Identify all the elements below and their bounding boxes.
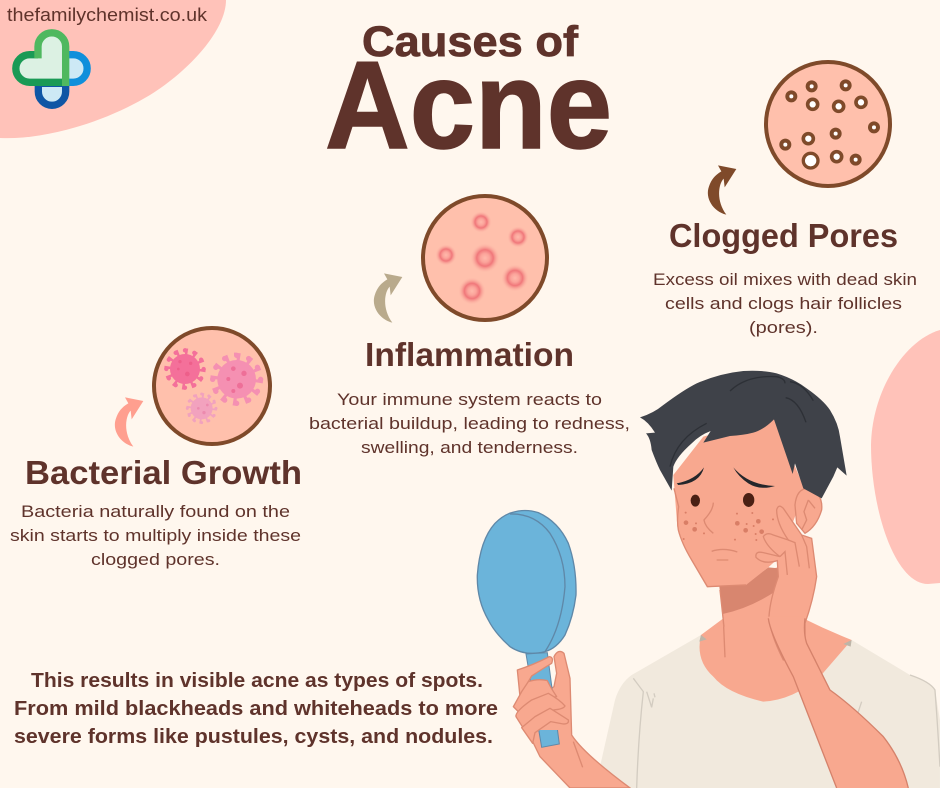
text: clogged pores description: Excess oil mixes with dead skin <box>653 270 917 289</box>
neck shadow <box>719 567 779 614</box>
icon: family chemist cross logo <box>16 33 87 105</box>
acne spots on cheeks <box>683 512 774 541</box>
arrow: brown <box>708 165 736 215</box>
blob: right <box>871 330 940 584</box>
text: bacterial growth description <box>10 502 301 569</box>
eyebrows <box>677 467 775 488</box>
text: bacterial growth description: Bacteria naturally found on the <box>21 502 290 521</box>
text: inflammation description: Your immune system reacts to <box>337 390 602 409</box>
palm cover over handle <box>528 687 567 730</box>
head, neck and hand <box>640 371 847 660</box>
arm and palm <box>533 651 630 788</box>
ear detail <box>802 500 815 530</box>
fingers <box>513 657 568 743</box>
arrow: peach <box>115 397 143 447</box>
text: clogged pores description: cells and clogs hair follicles <box>665 294 902 313</box>
text: bacterial growth description: clogged pores. <box>91 550 220 569</box>
text: inflammation description: bacterial buildup, leading to redness, <box>309 414 630 433</box>
face contour <box>674 488 746 587</box>
conclusion text: severe forms like pustules, cysts, and nodules. <box>14 726 493 748</box>
ear <box>795 488 822 533</box>
title: Acne <box>325 37 612 175</box>
text: clogged pores description <box>653 270 917 337</box>
heading: inflammation: Inflammation <box>365 336 574 373</box>
shirt and chest <box>600 618 940 788</box>
text: inflammation description: swelling, and tenderness. <box>361 438 578 457</box>
finger lines <box>780 535 809 575</box>
text: bacterial growth description: skin starts to multiply inside these <box>10 526 301 545</box>
heading: clogged pores: Clogged Pores <box>669 217 898 254</box>
title: Causes of <box>362 18 579 66</box>
mirror rim <box>510 514 565 652</box>
blob: top left <box>0 0 226 138</box>
text: inflammation description <box>309 390 630 457</box>
mirror head <box>477 510 576 653</box>
conclusion text: This results in visible acne as types of spots. <box>31 670 483 692</box>
forearm <box>768 617 908 788</box>
hair strands <box>670 377 813 467</box>
conclusion text <box>14 670 498 748</box>
icon: skin with bacteria <box>154 328 270 444</box>
illustration: person with acne looking in a mirror <box>477 371 940 788</box>
conclusion text: From mild blackheads and whiteheads to more <box>14 698 498 720</box>
panel: clogged pores <box>653 62 917 337</box>
arrow: khaki <box>374 273 402 323</box>
neck line <box>720 590 724 627</box>
icon: inflamed skin <box>423 196 547 320</box>
eyes <box>691 493 754 507</box>
hair <box>640 371 847 498</box>
wrist line <box>573 742 583 767</box>
website url: thefamilychemist.co.uk <box>7 5 208 25</box>
hand on cheek <box>756 506 817 660</box>
heading: bacterial growth: Bacterial Growth <box>25 454 302 491</box>
panel: bacterial growth <box>10 328 302 569</box>
mirror and holding hand <box>477 510 630 788</box>
panel: inflammation <box>309 196 630 457</box>
nose and mouth <box>704 503 737 560</box>
icon: skin with clogged pores <box>766 62 890 186</box>
mirror handle <box>526 653 559 747</box>
text: clogged pores description: (pores). <box>749 318 818 337</box>
face <box>673 417 805 587</box>
neck <box>719 567 780 627</box>
